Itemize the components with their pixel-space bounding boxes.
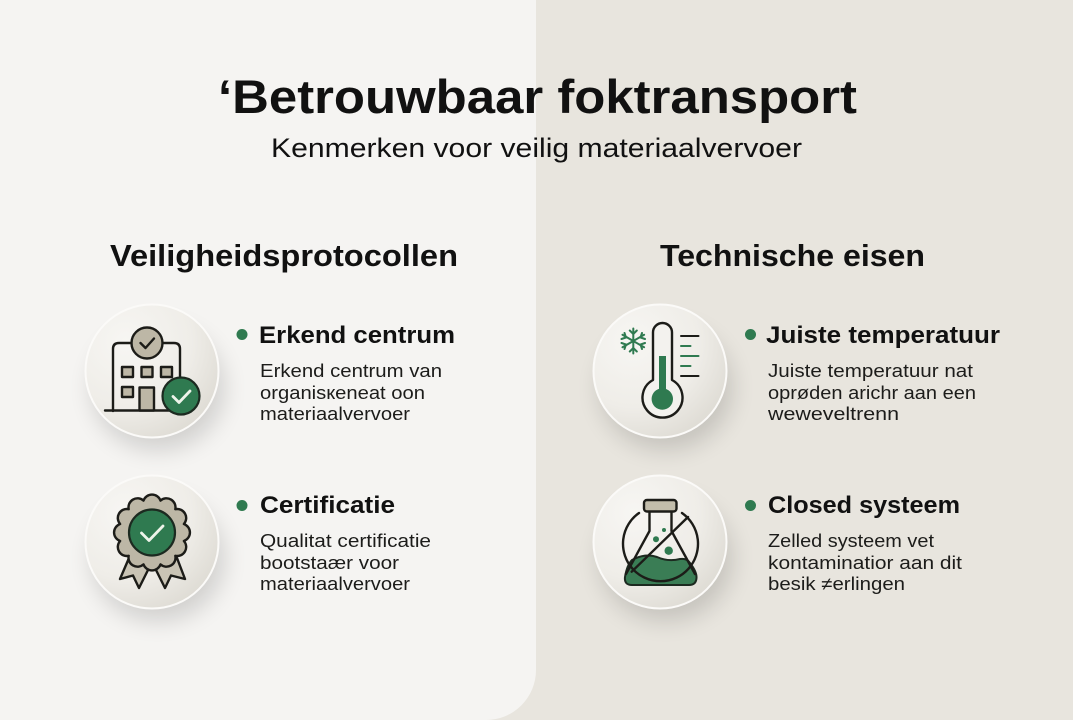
item description: Juiste temperatuur nat bbox=[768, 361, 973, 381]
heading: Veiligheidsprotocollen: Veiligheidsprotocollen bbox=[110, 238, 458, 273]
heading: Technische eisen: Technische eisen bbox=[660, 238, 925, 273]
bullet bbox=[236, 500, 248, 511]
title: ‘Betrouwbaar foktransport bbox=[218, 70, 857, 123]
item description bbox=[260, 361, 442, 424]
item description: weweveltrenn bbox=[767, 404, 899, 424]
icon: thermometer with snowflake bbox=[594, 304, 732, 450]
item description: Zelled systeem vet bbox=[768, 531, 934, 551]
subtitle: Kenmerken voor veilig materiaalvervoer bbox=[271, 133, 802, 163]
icon: building with check bbox=[86, 304, 224, 450]
item description: besik ≠erlingen bbox=[768, 574, 905, 594]
panel: left background bbox=[0, 0, 536, 720]
icon: flask with prohibition sign bbox=[594, 476, 732, 621]
bullet bbox=[236, 329, 248, 340]
panel: Juiste temperatuur bbox=[594, 304, 1000, 450]
item title: Closed systeem bbox=[768, 492, 960, 519]
item title: Certificatie bbox=[260, 492, 395, 519]
item description bbox=[767, 361, 976, 424]
item description bbox=[768, 531, 962, 594]
bullet bbox=[745, 329, 756, 340]
panel: Closed systeem bbox=[594, 476, 962, 621]
icon: rosette badge bbox=[86, 476, 224, 621]
item description: materiaalvervoer bbox=[260, 404, 410, 424]
bullet bbox=[745, 500, 756, 511]
item description: Erkend centrum van bbox=[260, 361, 442, 381]
item description: oprøden arichr aan een bbox=[768, 383, 976, 403]
item description: materiaalvervoer bbox=[260, 574, 410, 594]
panel: Certificatie bbox=[86, 476, 431, 621]
panel: Erkend centrum bbox=[86, 304, 455, 450]
item description: Qualitat certificatie bbox=[260, 531, 431, 551]
item description: kontaminatior aan dit bbox=[768, 553, 962, 573]
item description: organisкeneat oon bbox=[260, 383, 425, 403]
item description: bootstaær voor bbox=[260, 553, 399, 573]
item title: Juiste temperatuur bbox=[766, 322, 1000, 349]
item description bbox=[260, 531, 431, 594]
item title: Erkend centrum bbox=[259, 322, 455, 349]
